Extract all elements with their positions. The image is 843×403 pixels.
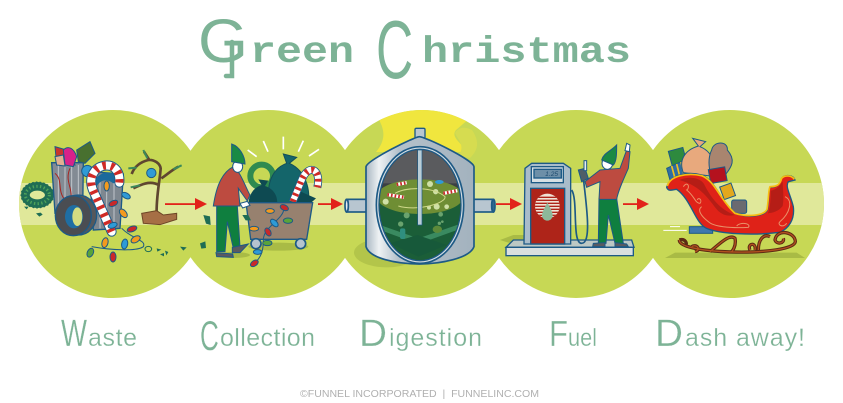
shadow [665,253,805,258]
title: G [198,7,248,75]
icon: wreath [21,182,53,217]
panel: digestion [345,128,495,267]
icon: string of lights [86,181,152,262]
arrow: digestion to fuel [496,198,522,210]
figure: elf at pump [578,143,630,247]
panel: sleigh [663,138,805,258]
icon: sleigh runner [679,233,795,252]
caption: Fuel [549,313,597,354]
arrow: waste to collection [165,198,207,210]
icon: sleigh body [667,174,795,234]
icon: side pipes [345,199,495,212]
caption: Waste [61,313,137,355]
background circles and band [19,110,824,298]
caption: Digestion: D [359,313,387,355]
icon: candy cane [91,165,119,232]
icon: sparkle rays [248,137,319,157]
panel: waste [21,142,211,262]
icon: gifts and toy sack [667,138,747,213]
caption: Digestion [359,313,482,355]
glow above digester [376,105,477,158]
icon: pump logo [535,194,560,221]
icon: trash bags [248,154,316,207]
icon: candy cane in cart [293,170,318,202]
icon: bare tree [128,150,182,225]
panel: collection [213,137,319,268]
figure: elf pushing cart [213,144,251,258]
price display: 1.25 [545,171,558,178]
arrow: collection to digestion [318,198,343,210]
icon: trash cans [52,163,123,230]
caption: Waste: W [61,313,87,355]
shadow [354,238,419,267]
icon: wreath behind cart [250,165,273,187]
caption: Waste: aste [88,324,137,352]
icon: scattered needles [157,215,211,256]
panel: fuel [500,143,634,256]
title: reen [250,32,354,74]
caption: Fuel: uel [568,324,597,352]
icon: tire [55,195,97,236]
caption: Collection: C [200,313,219,360]
caption: Digestion: igestion [389,324,482,352]
caption: Collection [200,313,315,360]
icon: garbage on top [55,142,95,177]
caption: Dash away! [655,313,805,355]
icon: cart [246,203,313,268]
icon: pump base [500,235,634,256]
candy canes [387,183,457,197]
arrow: fuel to sleigh [623,198,649,210]
icon: fuel pump [524,163,571,244]
sleigh scrolls [683,184,790,228]
digester contents [380,150,460,260]
footer credit: ©FUNNEL INCORPORATED | FUNNELINC.COM [300,388,539,400]
icon: speed lines [663,227,687,230]
title: hristmas [422,32,631,74]
icon: central shaft [418,150,422,225]
caption: Dash away!: D [655,313,683,355]
caption: Fuel: F [549,313,568,354]
icon: hose [572,178,588,243]
title [198,2,631,96]
icon: digester tank [366,128,474,264]
title: C [376,2,413,96]
caption: Dash away!: ash away! [685,324,805,352]
caption: Collection: ollection [220,324,315,352]
